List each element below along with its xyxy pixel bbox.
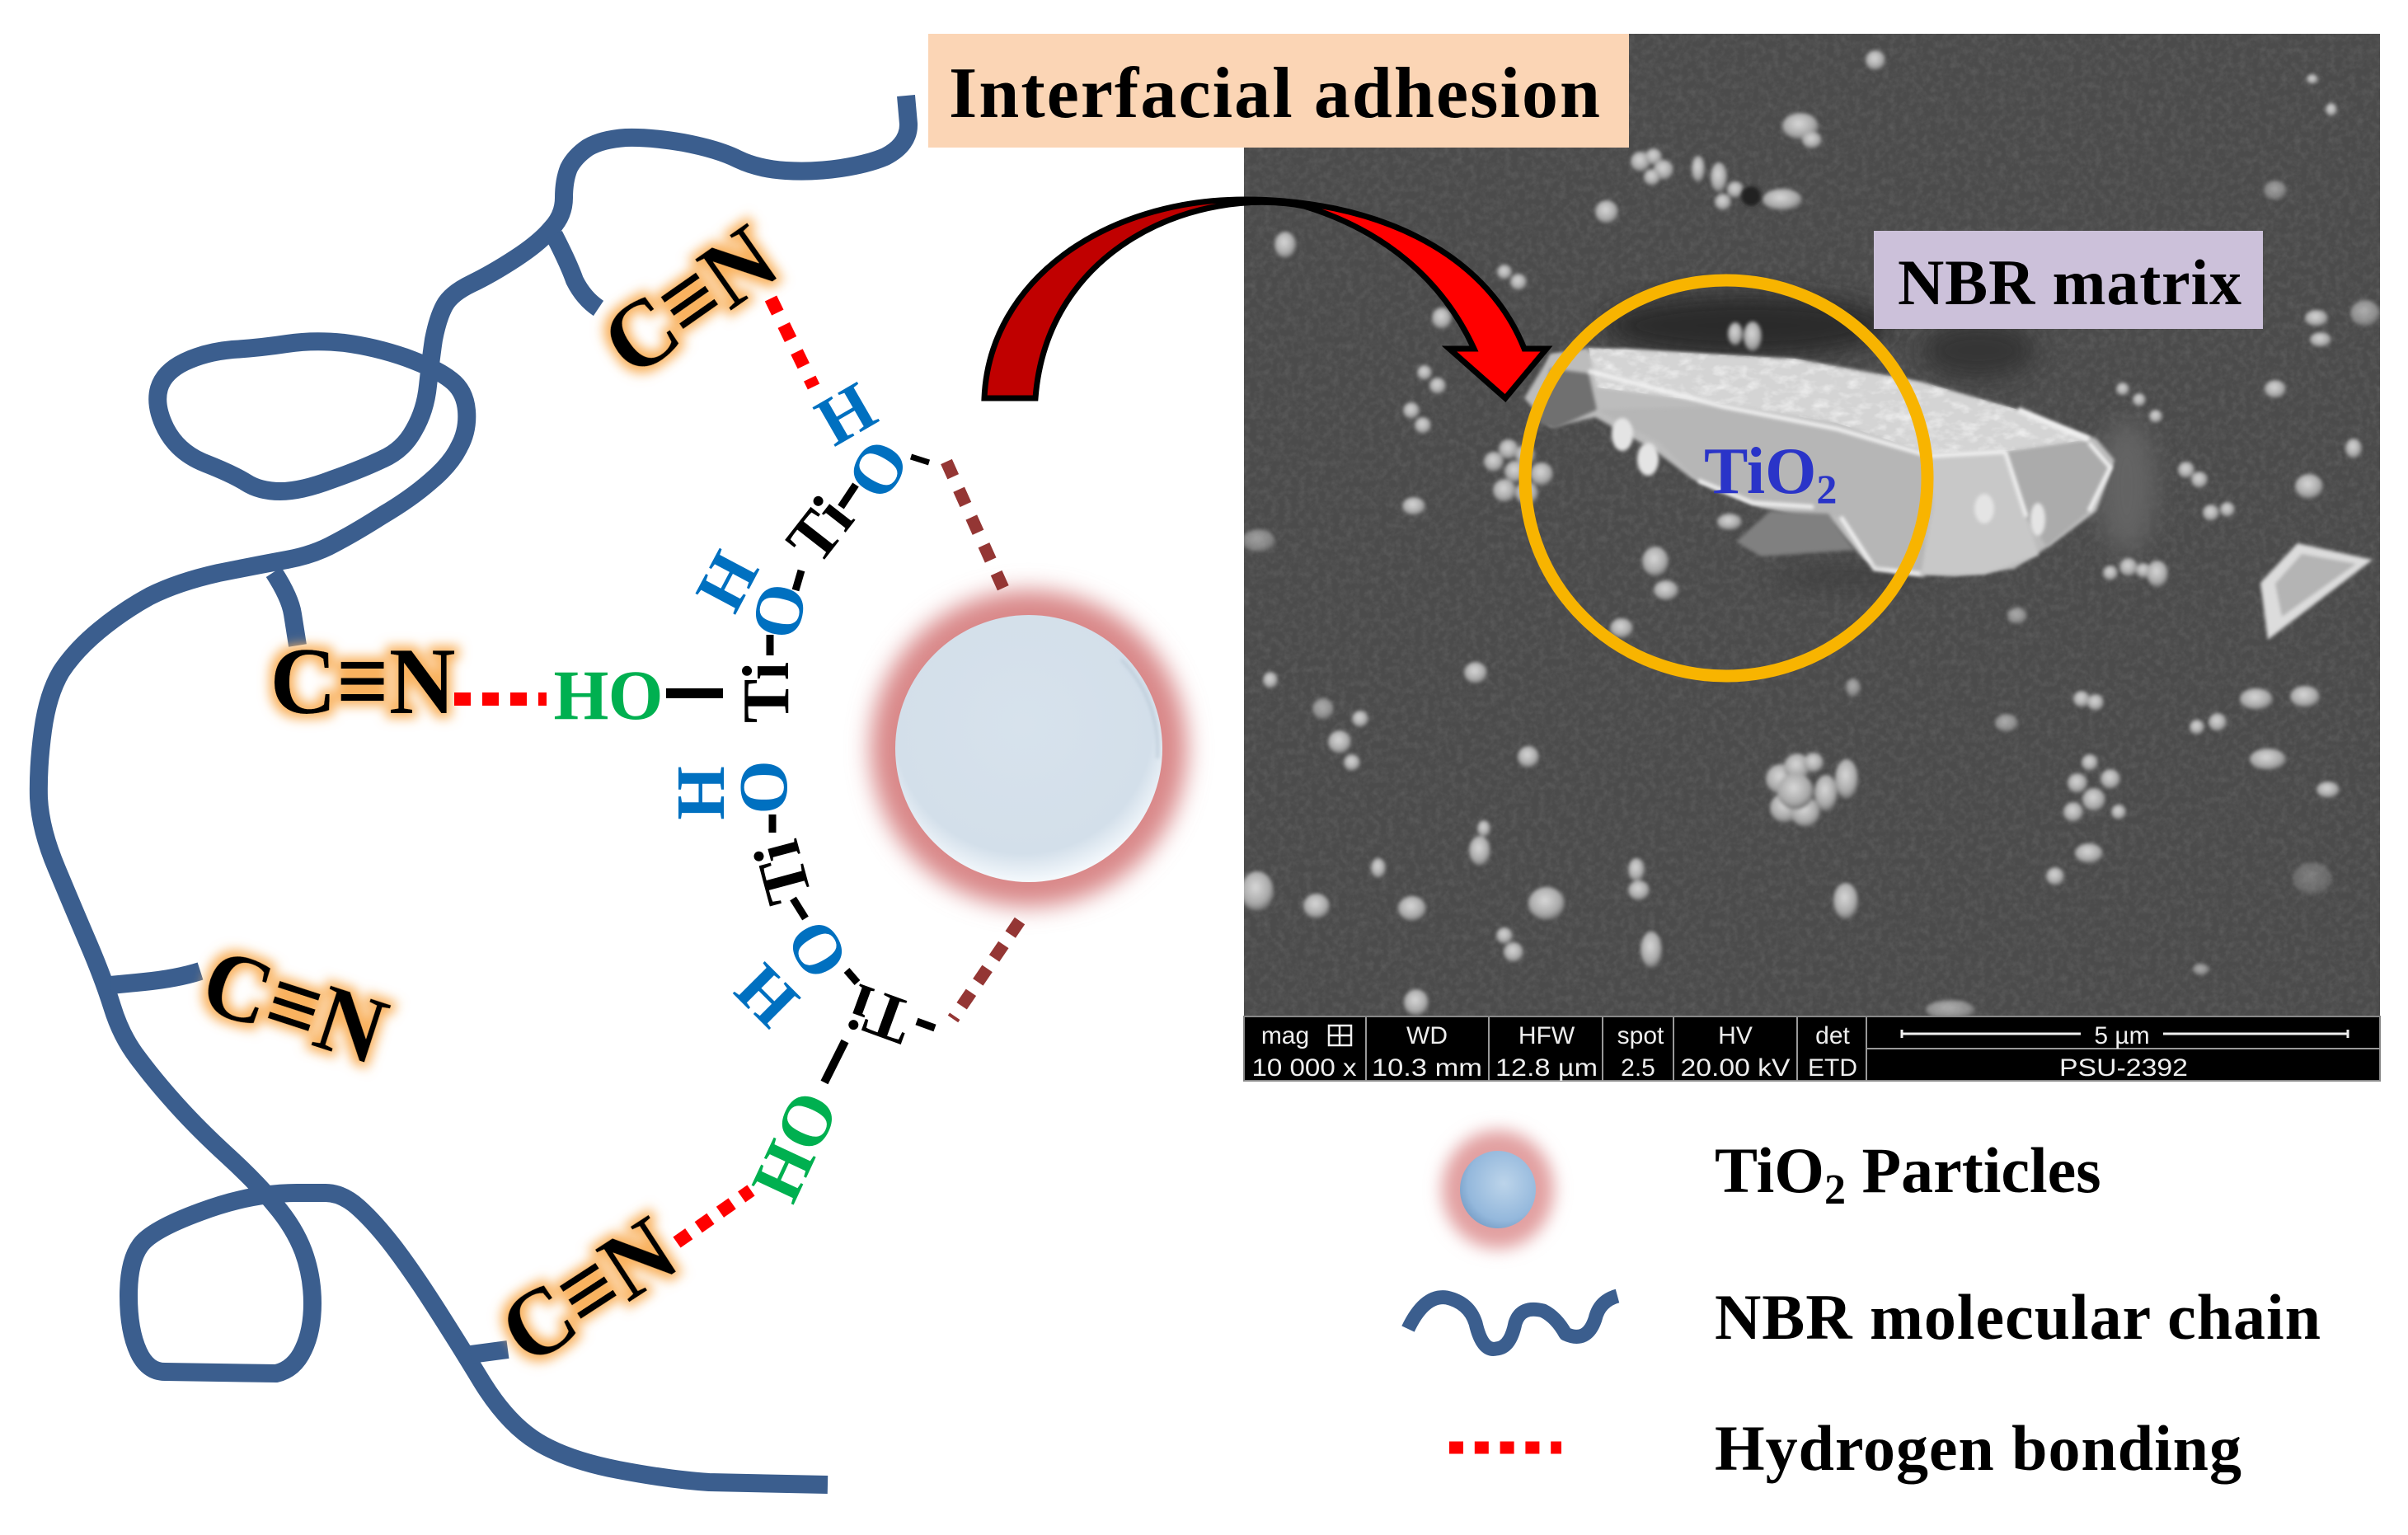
Ti-O ring molecule: H bbox=[804, 368, 889, 461]
icon: TiO2 particle bbox=[1442, 1130, 1554, 1249]
legend: NBR molecular chain: NBR molecular chain bbox=[1715, 1281, 2321, 1353]
particle body bbox=[895, 615, 1162, 882]
arrow bbox=[984, 200, 1547, 398]
particle halo bbox=[871, 590, 1187, 907]
nitrile group 2: C≡N bbox=[270, 629, 455, 735]
Ti-O ring molecule: H bbox=[681, 540, 774, 623]
panel: SEM info bar: WD bbox=[1406, 1022, 1448, 1049]
panel: SEM info bar: PSU-2392 bbox=[2059, 1054, 2188, 1082]
legend: NBR molecular chain bbox=[1408, 1281, 2321, 1353]
big TiO2 flake bbox=[1524, 342, 2115, 577]
legend: TiO2 particles: TiO bbox=[1715, 1134, 1824, 1206]
Ti-O ring molecule: Ti bbox=[740, 833, 826, 911]
Ti-O ring molecule: O bbox=[832, 427, 925, 512]
Ti-O ring molecule: Ti bbox=[730, 662, 803, 723]
Ti-O ring molecule: Ti bbox=[773, 484, 867, 576]
heading: Interfacial adhesion: Interfacial adhesion bbox=[949, 54, 1600, 134]
callout circle bbox=[1525, 280, 1927, 676]
Ti-O ring molecule: O bbox=[736, 576, 823, 645]
Ti-O ring molecule: O bbox=[771, 907, 864, 992]
nitrile group 4: C≡N bbox=[482, 1196, 695, 1386]
panel: SEM info bar: 2.5 bbox=[1621, 1054, 1655, 1082]
Ti-O ring molecule: H bbox=[663, 766, 739, 820]
icon: chain bbox=[1408, 1296, 1617, 1349]
Ti-O ring molecule: H bbox=[721, 950, 813, 1042]
legend: TiO2 particles: 2 bbox=[1824, 1167, 1846, 1213]
label: TiO2 on particle: TiO bbox=[1704, 435, 1816, 508]
Ti-O ring molecule: O bbox=[725, 760, 802, 814]
label: NBR matrix: NBR matrix bbox=[1898, 246, 2241, 318]
panel: SEM info bar: spot bbox=[1617, 1022, 1664, 1049]
panel: SEM info bar: 12.8 µm bbox=[1495, 1054, 1598, 1082]
label: TiO2 on particle: 2 bbox=[1816, 466, 1837, 512]
interface bonds to particle bbox=[946, 462, 1020, 1019]
panel: SEM info bar: HV bbox=[1718, 1022, 1753, 1049]
panel: SEM info bar: ETD bbox=[1808, 1054, 1857, 1082]
panel: SEM info bar: HFW bbox=[1518, 1022, 1575, 1049]
NBR molecular chain bbox=[39, 96, 908, 1485]
Ti-O ring molecule: Ti bbox=[839, 969, 922, 1059]
panel: SEM info bar: 10.3 mm bbox=[1372, 1054, 1482, 1082]
heading: Interfacial adhesion bbox=[928, 34, 1629, 148]
hydrogen bonds bbox=[454, 298, 814, 1242]
TiO2 particle bbox=[871, 590, 1187, 907]
legend: hydrogen bonding: Hydrogen bonding bbox=[1715, 1412, 2241, 1484]
panel: SEM info bar: mag bbox=[1261, 1022, 1309, 1049]
Ti-O ring molecule: HO bbox=[735, 1079, 854, 1213]
nitrile group 1: C≡N bbox=[584, 204, 796, 397]
panel: SEM info bar: det bbox=[1815, 1022, 1851, 1049]
Ti-O ring molecule: HO bbox=[554, 655, 663, 735]
legend: TiO2 particles bbox=[1442, 1130, 2101, 1249]
panel: SEM info bar: 10 000 x bbox=[1251, 1054, 1357, 1082]
label: NBR matrix bbox=[1874, 231, 2263, 329]
icon: red dashes bbox=[1449, 1441, 1561, 1454]
panel: SEM info bar: 5 µm bbox=[2094, 1022, 2150, 1049]
legend: TiO2 particles: Particles bbox=[1846, 1134, 2101, 1206]
SEM micrograph bbox=[1241, 34, 2380, 1020]
panel: SEM info bar: 20.00 kV bbox=[1680, 1054, 1791, 1082]
Ti-O ring molecule bbox=[554, 368, 935, 1213]
panel: SEM info bar bbox=[1244, 1016, 2380, 1082]
nitrile group 3: C≡N bbox=[190, 927, 399, 1086]
